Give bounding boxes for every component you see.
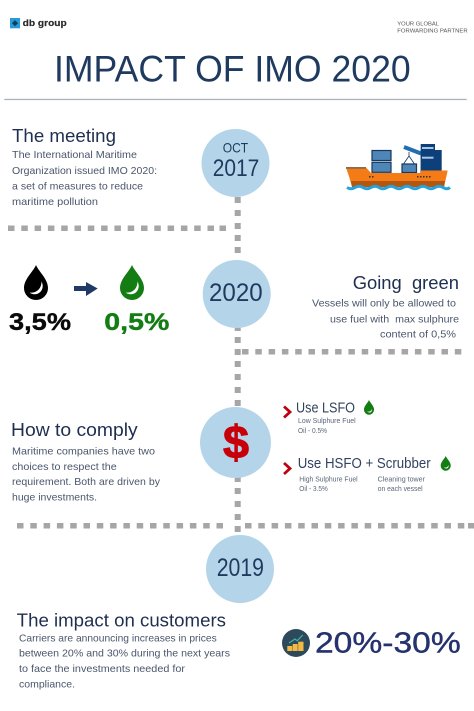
option: use LSFO [284, 400, 374, 435]
hull [346, 168, 448, 187]
chevron [284, 463, 290, 474]
circle: dollar [200, 407, 271, 478]
text: HSFO detail: Cleaning tower [378, 476, 426, 483]
text: impact description: between 20% and 30% during the next years [19, 648, 230, 660]
text: HSFO detail: Oil - 3.5% [299, 486, 328, 493]
timeline dotted connectors [8, 197, 474, 532]
heading: how to comply: How to comply [11, 419, 138, 440]
text: LSFO detail: Oil - 0.5% [298, 428, 327, 435]
icon: small green drop [364, 400, 374, 415]
waves [347, 186, 450, 189]
icon: growth chart [282, 629, 310, 657]
heading: going green: Going green [353, 272, 459, 293]
circle: dollar: $ [223, 416, 249, 468]
text: impact description: to face the investments needed for [19, 663, 186, 675]
circle: 2019 [206, 535, 274, 603]
text: HSFO detail: on each vessel [378, 486, 423, 493]
text: meeting description [12, 149, 157, 208]
text: LSFO detail: Low Sulphure Fuel [298, 418, 356, 425]
title rule [4, 99, 467, 100]
text: going green description: content of 0,5% [380, 329, 456, 341]
text: LSFO detail [298, 418, 356, 435]
text: impact description: Carriers are announcing increases in prices [19, 633, 217, 645]
text: meeting description: maritime pollution [12, 196, 98, 208]
text: going green description [312, 298, 459, 341]
arrow [74, 282, 98, 296]
title: IMPACT OF IMO 2020 [54, 49, 411, 90]
tagline [397, 22, 468, 35]
circle: 2020: 2020 [209, 279, 263, 307]
text: comply description: huge investments. [12, 492, 97, 504]
text: meeting description: a set of measures to reduce [12, 180, 143, 192]
text: HSFO detail [299, 476, 426, 493]
heading: impact: The impact on customers [17, 610, 226, 631]
heading: the meeting: The meeting [12, 125, 116, 146]
label: use HSFO + scrubber: Use HSFO + Scrubber [298, 456, 431, 472]
tagline: YOUR GLOBAL [397, 22, 440, 28]
containers [372, 150, 391, 160]
section: the meeting [12, 125, 157, 208]
text: going green description: use fuel with max sulphure [330, 314, 459, 326]
section: the impact on customers [17, 610, 230, 691]
drop figures [9, 265, 170, 336]
tagline: FORWARDING PARTNER [397, 29, 468, 35]
text: meeting description: The International Maritime [12, 149, 137, 161]
icon: green drop [120, 265, 144, 300]
crane [404, 147, 421, 154]
circle: Oct 2017 [202, 129, 270, 197]
text: meeting description: Organization issued IMO 2020: [12, 165, 157, 177]
option: use HSFO + scrubber [284, 456, 451, 493]
circle: Oct 2017: OCT [223, 140, 249, 156]
text: impact description: compliance. [19, 679, 75, 691]
text: comply description: choices to respect the [12, 461, 117, 473]
value: 20%-30%: 20%-30% [315, 628, 461, 660]
bridge tower [421, 144, 435, 173]
circle: Oct 2017: 2017 [213, 155, 259, 182]
text: HSFO detail: High Sulphure Fuel [299, 476, 358, 483]
section: how to comply [11, 419, 161, 504]
text: comply description [12, 445, 161, 504]
icon: black drop [24, 265, 48, 300]
label: use LSFO: Use LSFO [296, 401, 355, 417]
chevron [284, 406, 290, 418]
text: comply description: requirement. Both are driven by [12, 476, 161, 488]
logo: db group: db group [23, 18, 67, 29]
circle: 2019: 2019 [217, 554, 264, 582]
section: going green [312, 272, 459, 341]
icon: small green drop [441, 456, 451, 471]
icon: container ship [346, 144, 450, 189]
value: 3,5%: 3,5% [9, 309, 71, 336]
text: going green description: Vessels will only be allowed to [312, 298, 456, 310]
circle: 2020 [203, 260, 271, 328]
value: 0,5%: 0,5% [104, 309, 170, 336]
text: comply description: Maritime companies have two [12, 445, 155, 457]
text: impact description [19, 633, 230, 691]
